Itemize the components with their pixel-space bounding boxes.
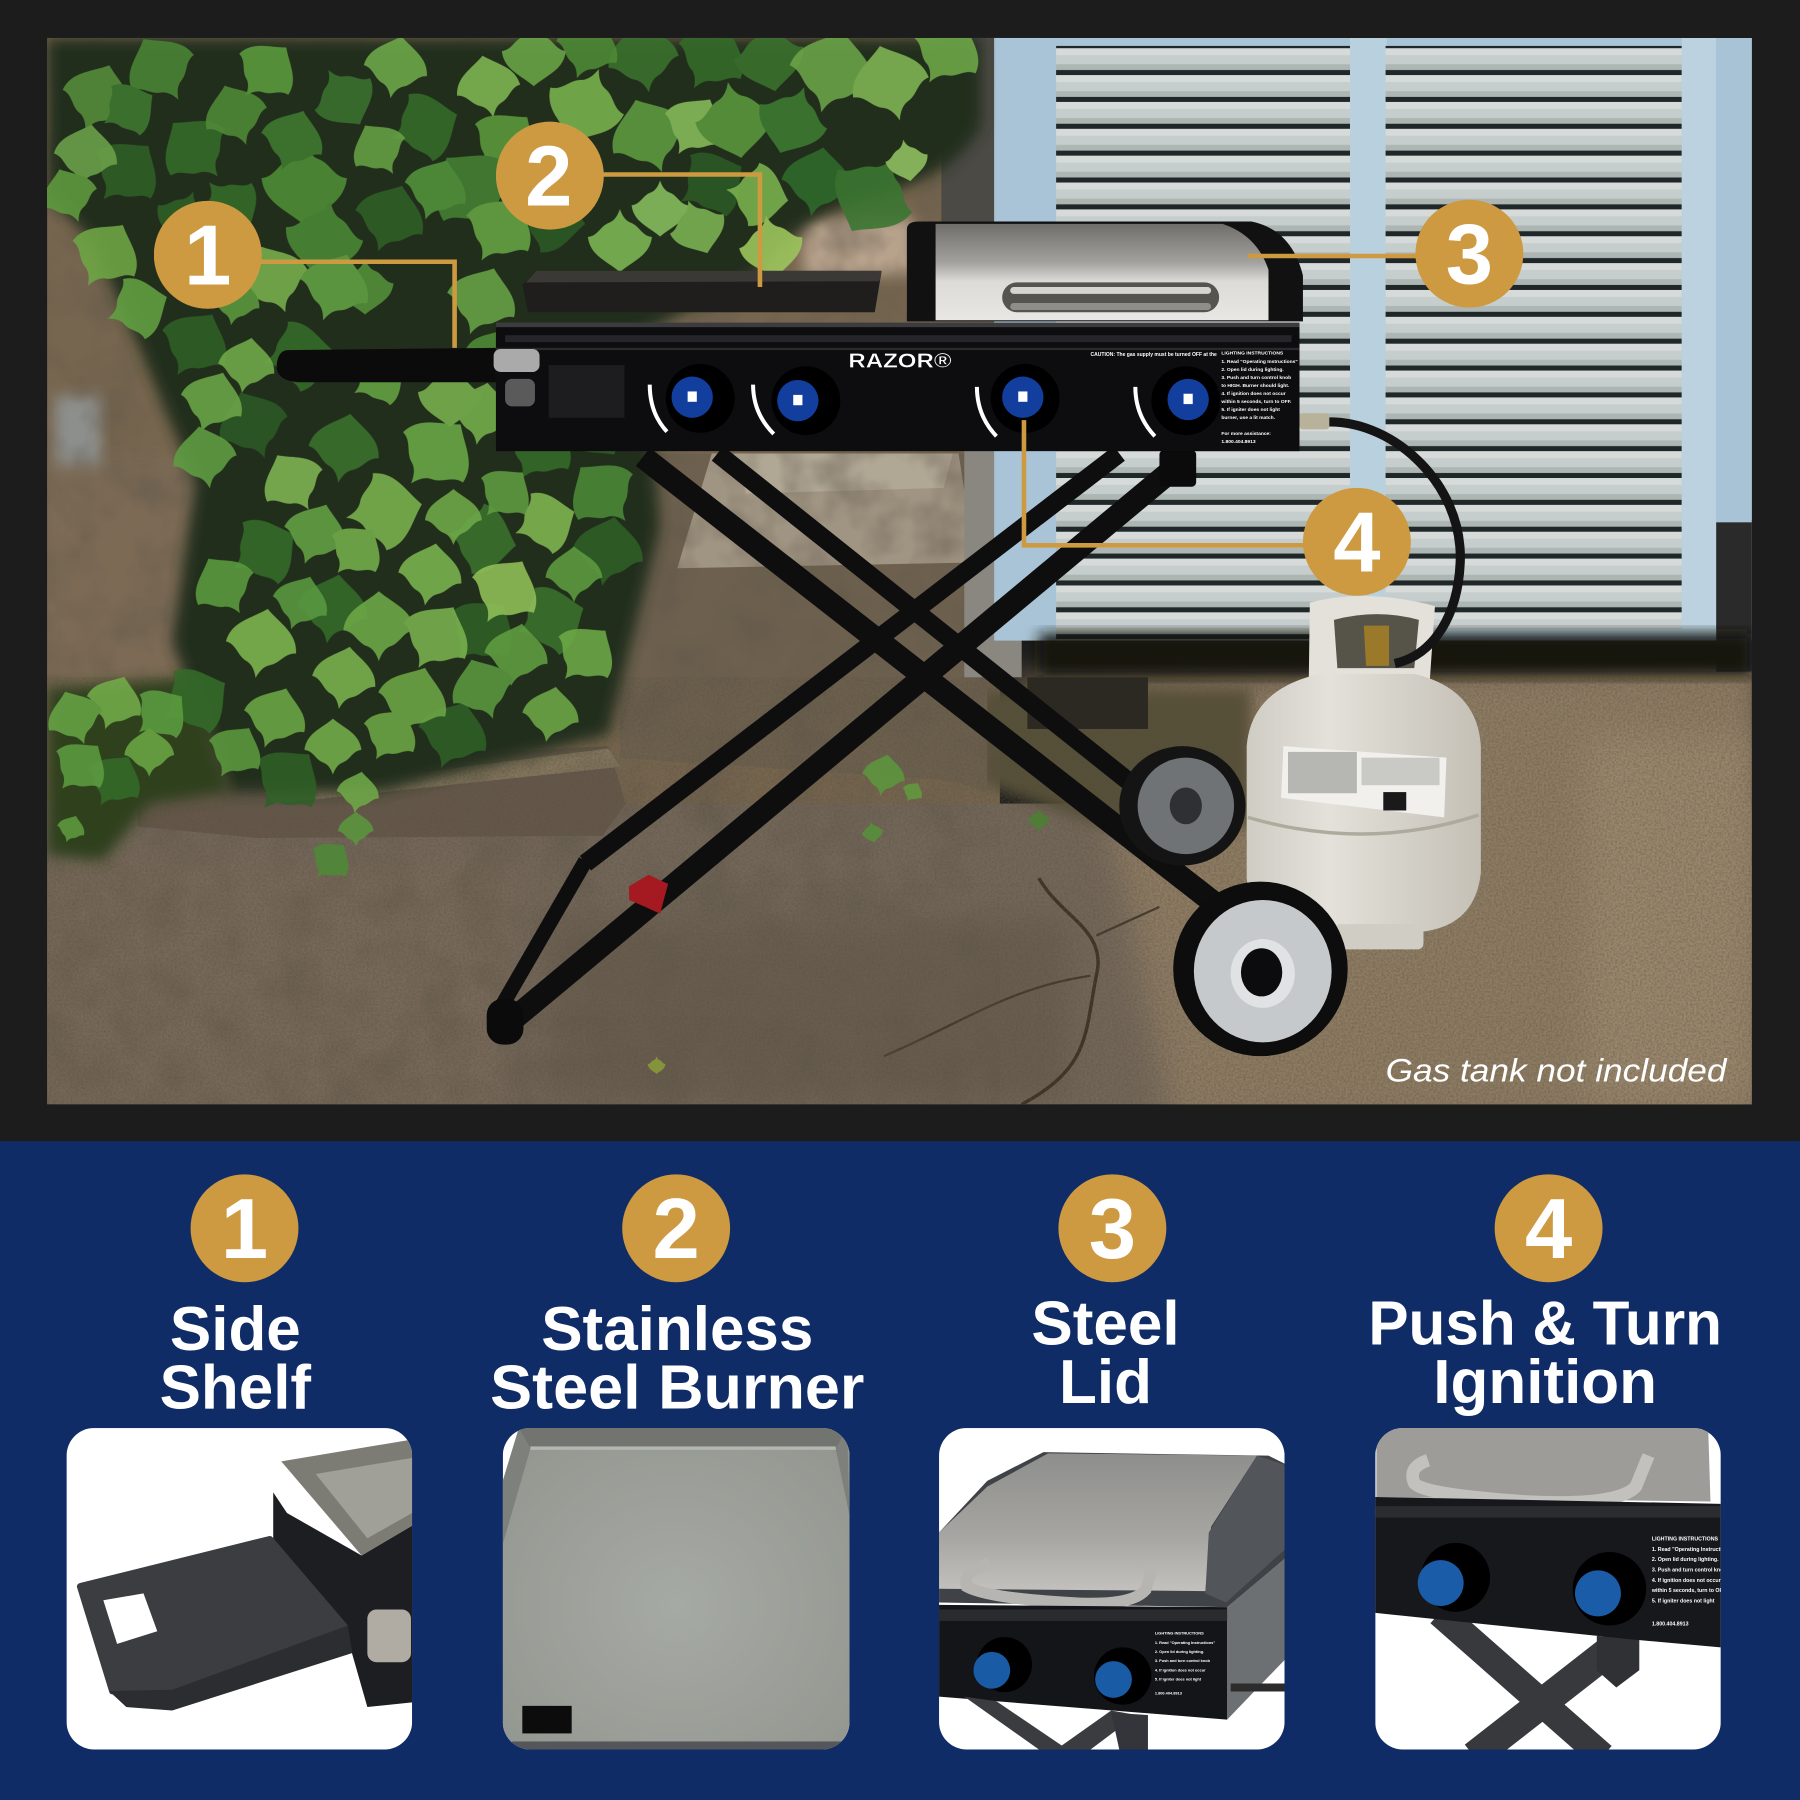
callout 1 [154, 201, 455, 348]
heading: side shelf: Side [170, 1295, 301, 1364]
propane tank [1247, 596, 1481, 949]
lighting instructions: LIGHTING INSTRUCTIONS [1221, 351, 1284, 357]
heading: side shelf [160, 1295, 311, 1423]
instructions label: LIGHTING INSTRUCTIONS [1155, 1631, 1204, 1636]
griddle body [494, 323, 1299, 451]
gas hose [1231, 1684, 1285, 1691]
heading: stainless steel burner [490, 1295, 864, 1423]
griddle body [1375, 1497, 1721, 1647]
number badge 4: 4 [1525, 1181, 1572, 1276]
number badge 1: 1 [221, 1181, 268, 1276]
heading: steel lid: Lid [1059, 1348, 1152, 1417]
instructions label: 1.800.404.8913 [1155, 1690, 1183, 1695]
feature 2: stainless steel burner [490, 1174, 864, 1749]
lighting instructions: 4. If ignition does not occur [1221, 391, 1286, 397]
flame arcs [650, 385, 1155, 436]
hinge latch [367, 1609, 411, 1662]
photo panel: griddle in a courtyard [33, 4, 1768, 1125]
lighting instructions: within 5 seconds, turn to OFF. [1220, 399, 1292, 405]
photo card: knobs close-up [1375, 1428, 1734, 1756]
heading: push and turn ignition [1368, 1289, 1722, 1417]
lighting instructions [1220, 351, 1298, 445]
concrete ground [47, 654, 1768, 1125]
callout 1: 1 [184, 208, 231, 303]
instructions label: 2. Open lid during lighting. [1155, 1649, 1204, 1654]
brand logo: RAZOR® [848, 349, 952, 372]
rear wheel [1119, 746, 1246, 866]
griddle tray [281, 1440, 412, 1555]
lighting instructions: 1. Read "Operating Instructions" [1221, 359, 1298, 365]
lid handle [966, 1564, 1153, 1604]
feature 1: side shelf [67, 1174, 412, 1749]
instructions label: 1. Read "Operating Instructions" [1155, 1640, 1215, 1645]
lit leaves layer [33, 4, 1050, 1074]
griddle tray [522, 271, 882, 312]
callout 4 [1024, 420, 1411, 596]
instructions label: 4. If ignition does not occur [1652, 1578, 1721, 1584]
heading: steel lid: Steel [1031, 1289, 1180, 1358]
heading: stainless steel burner: Steel Burner [490, 1354, 864, 1423]
griddle body [939, 1605, 1227, 1720]
lid handle [1413, 1456, 1648, 1502]
griddle side [1227, 1559, 1285, 1720]
legs [964, 1697, 1068, 1749]
number badge 3: 3 [1089, 1181, 1136, 1276]
caution label: CAUTION: The gas supply must be turned OFF at the [1091, 352, 1217, 358]
number badge 1 [191, 1174, 298, 1282]
lighting instructions: 3. Push and turn control knob [1221, 375, 1291, 381]
griddle lid [907, 222, 1303, 321]
drain pipe [941, 38, 1040, 677]
callout 2: 2 [525, 128, 572, 223]
lighting instructions: For more assistance: [1221, 431, 1271, 437]
stone wall backdrop [47, 38, 1000, 841]
leg bracket and foot [487, 450, 1196, 1045]
side shelf [277, 348, 496, 382]
heading: push and turn ignition: Push & Turn [1368, 1289, 1722, 1358]
number badge 2 [622, 1174, 730, 1282]
tank valve [1364, 626, 1389, 666]
tank label [1281, 746, 1446, 817]
callout 4: 4 [1333, 495, 1381, 590]
front wheel [1173, 882, 1348, 1056]
griddle lid [1376, 1428, 1710, 1502]
instructions label: 3. Push and turn control knob [1652, 1568, 1727, 1574]
louvered shutters [996, 38, 1752, 729]
hinge latch [494, 349, 540, 372]
shelf handle hole [103, 1593, 157, 1644]
navy feature band [0, 1141, 1800, 1800]
lid handle [1002, 282, 1219, 312]
lighting instructions: burner, use a lit match. [1221, 415, 1276, 421]
stone steps and planter [138, 453, 987, 838]
heading: steel lid [1031, 1289, 1180, 1417]
instructions label: 2. Open lid during lighting. [1652, 1557, 1719, 1563]
lighting instructions: 2. Open lid during lighting. [1221, 367, 1284, 373]
photo card: side shelf [67, 1428, 412, 1749]
heading: push and turn ignition: Ignition [1433, 1348, 1657, 1417]
instructions label: 5. If igniter does not light [1155, 1677, 1202, 1682]
number badge 4 [1495, 1174, 1603, 1282]
feature 3: steel lid [939, 1174, 1285, 1749]
instructions label: 4. If ignition does not occur [1155, 1667, 1206, 1672]
heading: side shelf: Shelf [160, 1354, 311, 1423]
griddle body side [273, 1492, 412, 1707]
shelf board [80, 1539, 344, 1691]
surface grain [47, 38, 1752, 1104]
note: gas tank: Gas tank not included [1386, 1051, 1728, 1088]
shadowed leaves layer [76, 10, 810, 831]
instructions label [1651, 1537, 1734, 1628]
photo card: griddle plate [503, 1428, 849, 1749]
instructions label: 3. Push and turn control knob [1155, 1658, 1211, 1663]
vent hole [522, 1706, 572, 1733]
legs [1440, 1613, 1603, 1756]
griddle lid [939, 1452, 1285, 1607]
lighting instructions: 1.800.404.8913 [1221, 439, 1256, 445]
folding X legs [499, 453, 1219, 1024]
callout 2 [496, 122, 760, 287]
photo card: lid close-up [939, 1428, 1285, 1749]
instructions label: 1.800.404.8913 [1652, 1622, 1689, 1628]
knobs [977, 1637, 1032, 1692]
number badge 3 [1058, 1174, 1166, 1282]
instructions label: LIGHTING INSTRUCTIONS [1652, 1537, 1719, 1543]
gas hose [1299, 413, 1460, 664]
ivy foliage [33, 4, 1050, 1074]
red latch [629, 875, 668, 914]
instructions label: 1. Read "Operating Instructions" [1652, 1547, 1734, 1553]
instructions label: 5. If igniter does not light [1652, 1599, 1715, 1605]
callout 3: 3 [1446, 207, 1493, 302]
instructions label: within 5 seconds, turn to OFF [1651, 1588, 1727, 1594]
lighting instructions: to HIGH. Burner should light. [1221, 383, 1290, 389]
instructions label [1155, 1631, 1215, 1695]
control knobs [666, 364, 1220, 435]
knobs [1421, 1543, 1490, 1612]
callout 3 [1248, 200, 1523, 308]
heading: stainless steel burner: Stainless [541, 1295, 813, 1364]
number badge 2: 2 [653, 1181, 700, 1276]
lighting instructions: 5. If igniter does not light [1221, 407, 1280, 413]
feature 4: push and turn ignition [1368, 1174, 1734, 1756]
